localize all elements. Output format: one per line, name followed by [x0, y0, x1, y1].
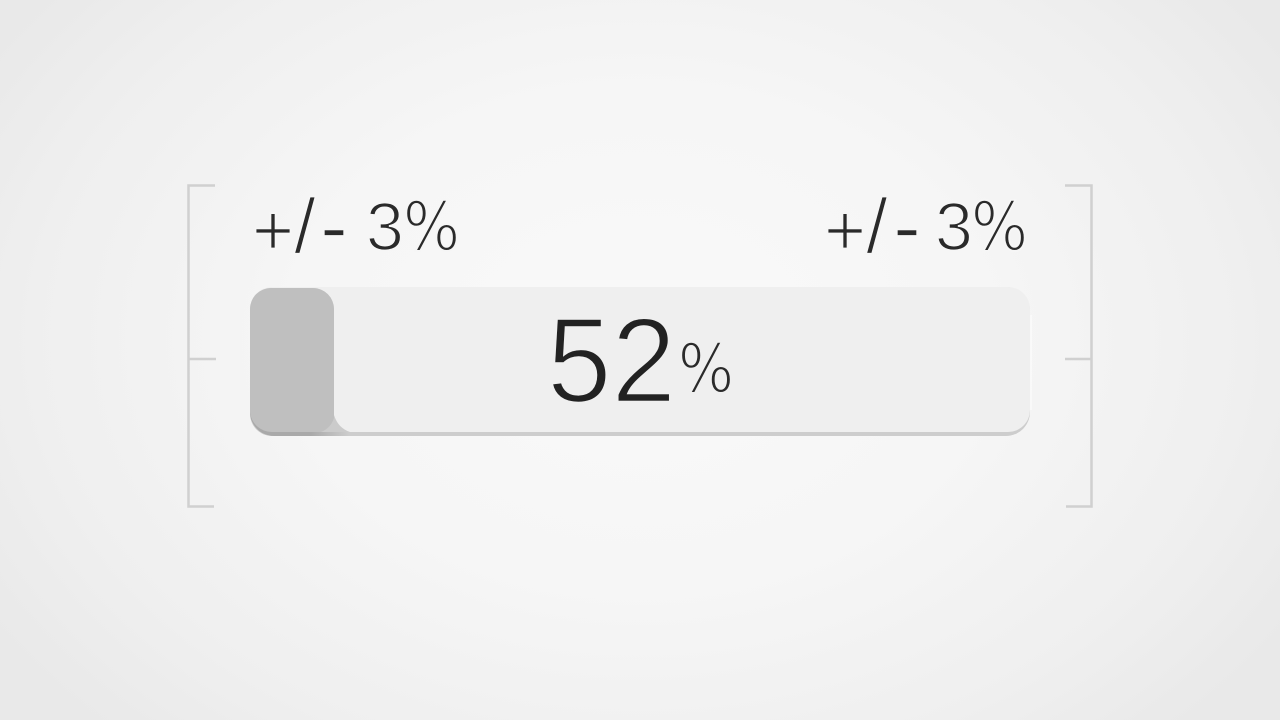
bar fill shadow	[250, 288, 350, 436]
bar bottom edge under fill	[250, 412, 350, 436]
right margin sign and digit: +	[824, 191, 866, 271]
left bracket	[188, 186, 216, 506]
left margin sign and digit: /	[294, 182, 316, 270]
right margin sign and digit: -	[893, 179, 921, 273]
left margin sign and digit: 3	[366, 189, 404, 265]
main value	[547, 292, 734, 428]
right margin label	[824, 179, 1028, 273]
left margin sign and digit: +	[252, 191, 294, 271]
left margin label	[252, 179, 460, 273]
bar track shadow edge	[250, 287, 1030, 436]
bar track	[250, 287, 1030, 432]
left margin percent: %	[403, 188, 460, 267]
value percent sign: %	[678, 330, 734, 409]
progress bar	[250, 287, 1031, 436]
bar fill	[250, 288, 334, 432]
right margin percent: %	[971, 188, 1028, 267]
bar right highlight	[1030, 315, 1032, 410]
value number: 52	[547, 292, 676, 428]
left margin sign and digit: -	[320, 179, 348, 273]
right margin sign and digit: 3	[935, 189, 973, 265]
right bracket	[1065, 186, 1092, 506]
right margin sign and digit: /	[866, 182, 888, 270]
